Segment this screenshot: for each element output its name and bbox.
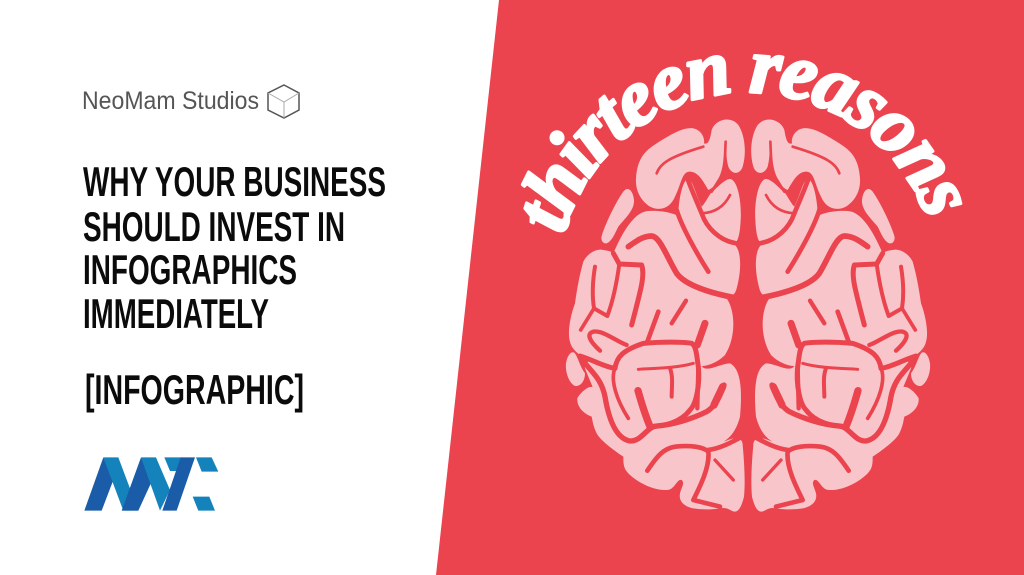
- panel: red diagonal background: [436, 0, 1024, 575]
- title: [83, 158, 386, 337]
- logo: NeoMam Studios: NeoMam Studios: [82, 87, 259, 115]
- sulci: [657, 147, 703, 173]
- right hemisphere: [751, 120, 930, 512]
- left hemisphere: [566, 120, 745, 512]
- title: SHOULD INVEST IN: [83, 203, 345, 250]
- title: INFOGRAPHICS: [83, 246, 297, 293]
- title: WHY YOUR BUSINESS: [83, 158, 386, 205]
- brain illustration: [566, 120, 930, 512]
- logo: MT blue mark: [84, 457, 218, 511]
- title: IMMEDIATELY: [83, 290, 269, 337]
- subtitle: infographic tag: [INFOGRAPHIC]: [85, 366, 304, 413]
- icon: cube: [268, 85, 299, 118]
- arc title: thirteen reasons: thirteen reasons: [520, 54, 962, 232]
